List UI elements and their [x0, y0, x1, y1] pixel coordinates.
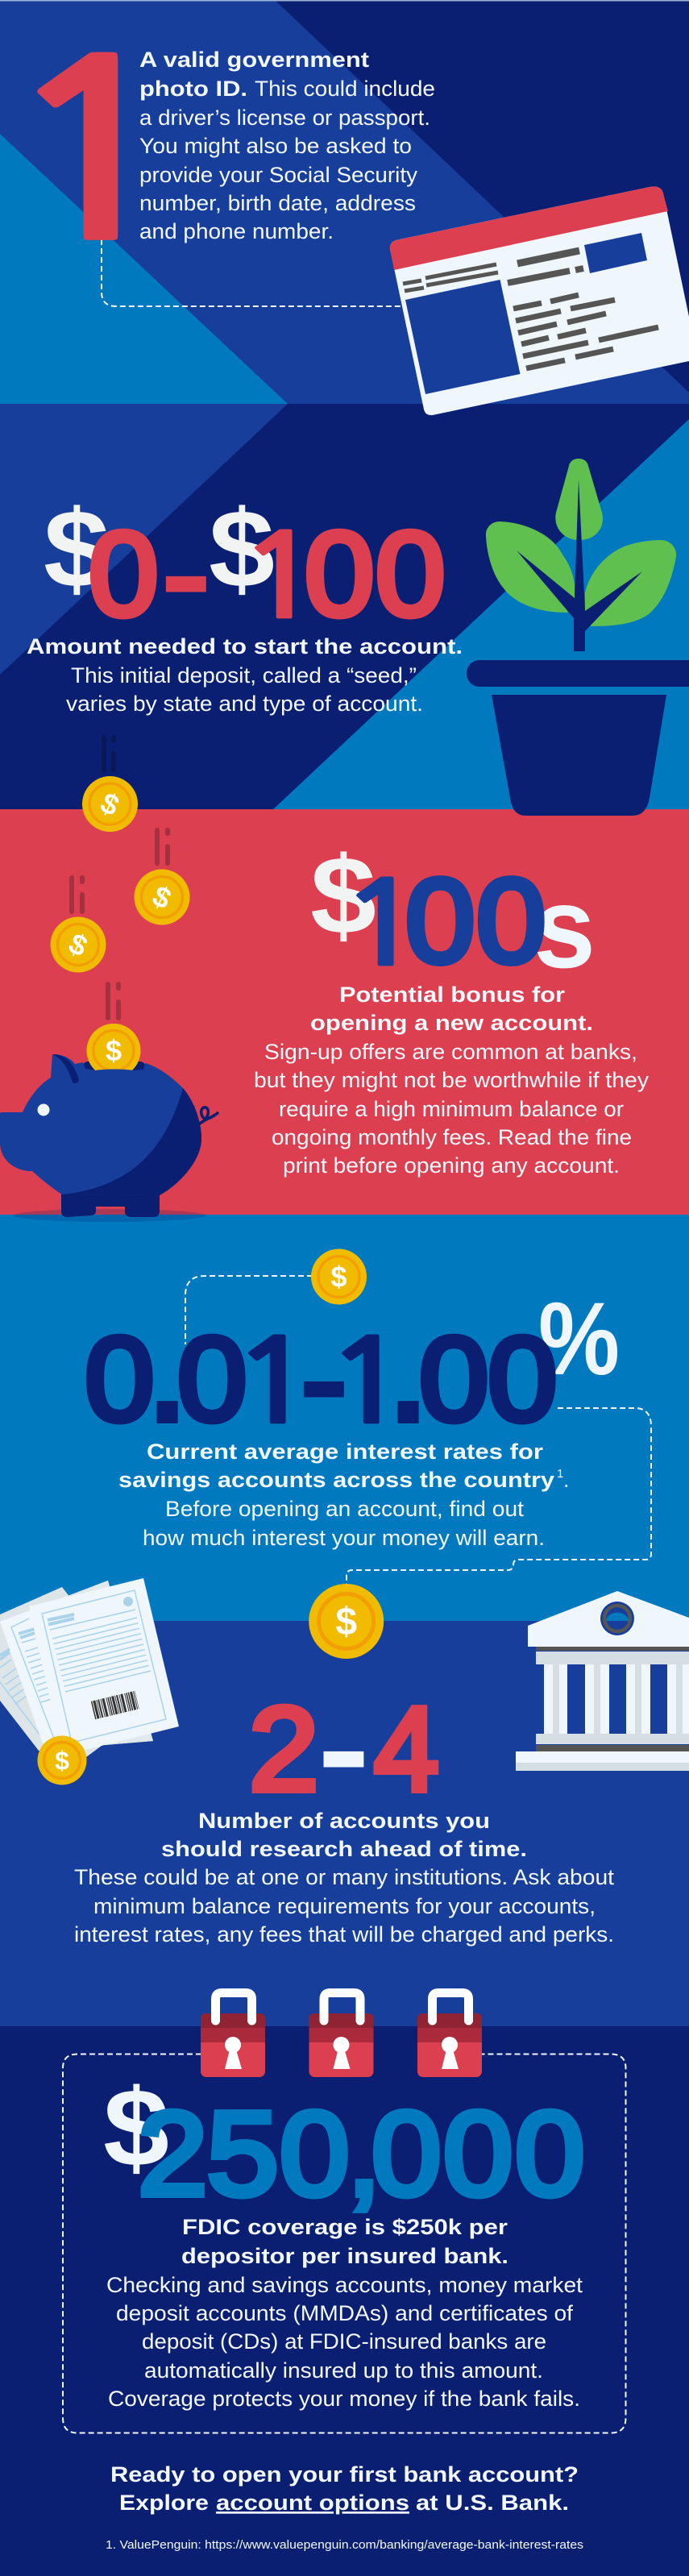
heading figure: $250,000: , — [347, 2088, 380, 2221]
text block: potential bonus — [254, 983, 650, 1178]
text block: government ID: A valid government — [139, 48, 369, 72]
heading figure: $100s: $ — [310, 834, 376, 958]
dashed connector from numeral to ID card — [102, 239, 401, 306]
text block: amount needed — [27, 634, 463, 716]
heading figure: 2-4: 2 — [249, 1683, 319, 1816]
heading figure: $0-$100 — [44, 488, 445, 642]
text block: interest rates: Before opening an account, find out — [165, 1497, 525, 1521]
text block: government ID: and phone number. — [139, 219, 334, 243]
heading figure: 2-4: - — [322, 1684, 366, 1817]
icon: coin 3: $ — [64, 926, 93, 963]
heading figure: 0.01-1.00%: . — [392, 1311, 425, 1444]
text block: interest rates: how much interest your money will earn. — [143, 1526, 545, 1550]
text block: number of accounts: interest rates, any fees that will be charged and perks. — [74, 1922, 614, 1947]
motion lines: coin 1 — [104, 737, 114, 770]
text block: FDIC coverage: Checking and savings accounts, money market — [106, 2273, 583, 2297]
icon: ID card — [390, 186, 689, 415]
heading figure: $250,000: 0 — [371, 2088, 442, 2221]
heading figure: $0-$100: $ — [209, 488, 275, 611]
call to action: account options — [216, 2491, 409, 2515]
heading figure: $0-$100: $ — [44, 488, 110, 611]
panel: FDIC coverage background — [0, 2026, 689, 2576]
text block: interest rates: Current average interest rates for — [147, 1440, 544, 1464]
text block: government ID: photo ID. — [139, 77, 247, 101]
heading figure: $100s: 0 — [405, 854, 475, 988]
footnote: 1. ValuePenguin: https://www.valuepenguin.com/banking/average-bank-interest-rates — [106, 2538, 583, 2552]
heading figure: $100s: s — [533, 864, 596, 992]
text block: potential bonus: opening a new account. — [310, 1011, 593, 1035]
panel: number of accounts background — [0, 1621, 689, 2026]
call to action: Ready to open your first bank account? — [110, 2462, 579, 2487]
panel: interest rates background — [0, 1215, 689, 1621]
text block: FDIC coverage: deposit accounts (MMDAs) and certificates of — [116, 2301, 574, 2325]
icon: plant in pot — [467, 459, 689, 816]
heading figure: 0.01-1.00%: . — [151, 1311, 184, 1444]
icon: coin above rate — [311, 1249, 367, 1304]
icon: bank building — [516, 1591, 689, 1771]
text block: number of accounts: Number of accounts you — [198, 1809, 490, 1833]
heading figure: $100s: 1 — [337, 867, 428, 983]
panel: bonus background — [0, 809, 689, 1215]
text block: interest rates: . — [563, 1468, 570, 1492]
dashed frame around FDIC coverage — [63, 2054, 625, 2433]
icon: piggy bank with coin — [0, 1024, 218, 1222]
text block: potential bonus: require a high minimum balance or — [279, 1097, 624, 1121]
icon: large coin — [309, 1584, 384, 1659]
text block: FDIC coverage: depositor per insured bank. — [181, 2244, 508, 2268]
motion lines: coin 3 — [72, 878, 82, 912]
icon: piggy bank with coin: $ — [106, 1034, 122, 1067]
text block: potential bonus: print before opening any account. — [283, 1153, 620, 1178]
call to action — [110, 2462, 579, 2515]
icon: coin above rate: $ — [330, 1261, 347, 1293]
icon: coin 3 — [50, 917, 106, 972]
heading figure: 0.01-1.00%: 1 — [229, 1325, 320, 1441]
heading figure: 0.01-1.00%: - — [301, 1314, 347, 1447]
text block: amount needed: varies by state and type of account. — [66, 692, 423, 716]
text block: amount needed: This initial deposit, called a “seed,” — [71, 663, 417, 688]
text block: potential bonus: but they might not be worthwhile if they — [254, 1068, 650, 1092]
panel: government ID background — [0, 0, 689, 404]
call to action: at U.S. Bank. — [416, 2491, 569, 2515]
heading figure: 0.01-1.00%: % — [538, 1282, 620, 1397]
text block: number of accounts: These could be at one or many institutions. Ask about — [74, 1865, 615, 1889]
heading figure: $100s — [310, 834, 596, 992]
heading figure: 2-4: 4 — [374, 1683, 439, 1816]
icon: coin 2: $ — [147, 879, 176, 916]
motion lines: coin 2 — [157, 830, 168, 863]
text block: government ID: provide your Social Security — [139, 163, 418, 187]
text block: FDIC coverage: Coverage protects your money if the bank fails. — [108, 2387, 580, 2411]
icon: coin on documents: $ — [55, 1746, 69, 1775]
text block: potential bonus: Sign-up offers are common at banks, — [264, 1040, 637, 1064]
heading figure: $250,000: 5 — [207, 2088, 279, 2221]
text block: number of accounts: minimum balance requirements for your accounts, — [93, 1894, 596, 1918]
icon: coin 1: $ — [96, 786, 124, 822]
heading figure: $0-$100: 0 — [305, 508, 374, 641]
text block: potential bonus: ongoing monthly fees. Read the fine — [272, 1125, 632, 1149]
icon: padlock 3 — [417, 1992, 482, 2077]
heading figure: $250,000 — [103, 2067, 585, 2221]
text block: interest rates: savings accounts across the country — [118, 1468, 554, 1492]
icon: coin 2 — [134, 869, 190, 925]
text block: government ID: a driver’s license or passport. — [139, 106, 430, 130]
dashed connector from rate figure to large coin — [347, 1408, 651, 1585]
heading figure: $0-$100: 1 — [235, 520, 326, 636]
text block: government ID: number, birth date, address — [139, 191, 416, 215]
heading figure: $250,000: 2 — [138, 2088, 208, 2221]
heading figure: 0.01-1.00%: 0 — [177, 1313, 247, 1446]
heading figure: $250,000: $ — [103, 2067, 169, 2190]
text block: number of accounts — [74, 1809, 615, 1947]
big numeral 1: 1 — [0, 32, 191, 277]
icon: padlock 2 — [309, 1992, 374, 2077]
icon: coin on documents — [37, 1736, 87, 1785]
icon: stack of documents — [0, 1578, 179, 1757]
text block: FDIC coverage — [106, 2215, 583, 2411]
heading figure: $0-$100: 0 — [89, 508, 158, 641]
heading figure: $250,000: 0 — [280, 2088, 350, 2221]
text block: interest rates: 1 — [557, 1467, 563, 1481]
motion lines: coin 4 — [108, 984, 118, 1018]
panel: seed deposit background — [0, 404, 689, 810]
text block: number of accounts: should research ahead of time. — [161, 1837, 527, 1861]
text block: government ID — [139, 48, 435, 243]
text block: potential bonus: Potential bonus for — [339, 983, 566, 1007]
icon: padlock 1 — [201, 1992, 265, 2077]
heading figure: 0.01-1.00%: 0 — [488, 1313, 558, 1446]
heading figure: 0.01-1.00%: 0 — [85, 1313, 155, 1446]
icon: coin 1 — [82, 776, 138, 832]
heading figure: 2-4 — [249, 1683, 439, 1817]
heading figure: $0-$100: - — [164, 509, 209, 642]
heading figure: $100s: 0 — [476, 854, 546, 988]
heading figure: 0.01-1.00%: 0 — [419, 1313, 488, 1446]
call to action: Explore — [119, 2491, 209, 2515]
heading figure: 0.01-1.00% — [85, 1282, 620, 1447]
text block: interest rates — [118, 1440, 570, 1550]
heading figure: $250,000: 0 — [443, 2088, 513, 2221]
text block: government ID: This could include — [255, 77, 435, 101]
text block: government ID: You might also be asked to — [139, 134, 412, 158]
heading figure: $0-$100: 0 — [376, 508, 445, 641]
icon: large coin: $ — [335, 1601, 357, 1643]
text block: FDIC coverage: deposit (CDs) at FDIC-insured banks are — [142, 2329, 546, 2354]
text block: FDIC coverage: automatically insured up to this amount. — [144, 2358, 543, 2383]
heading figure: $250,000: 0 — [515, 2088, 585, 2221]
text block: FDIC coverage: FDIC coverage is $250k per — [182, 2215, 508, 2239]
dashed connector from small coin to rate figure — [185, 1276, 313, 1344]
text block: amount needed: Amount needed to start the account. — [27, 634, 463, 659]
heading figure: 0.01-1.00%: 1 — [322, 1325, 413, 1441]
